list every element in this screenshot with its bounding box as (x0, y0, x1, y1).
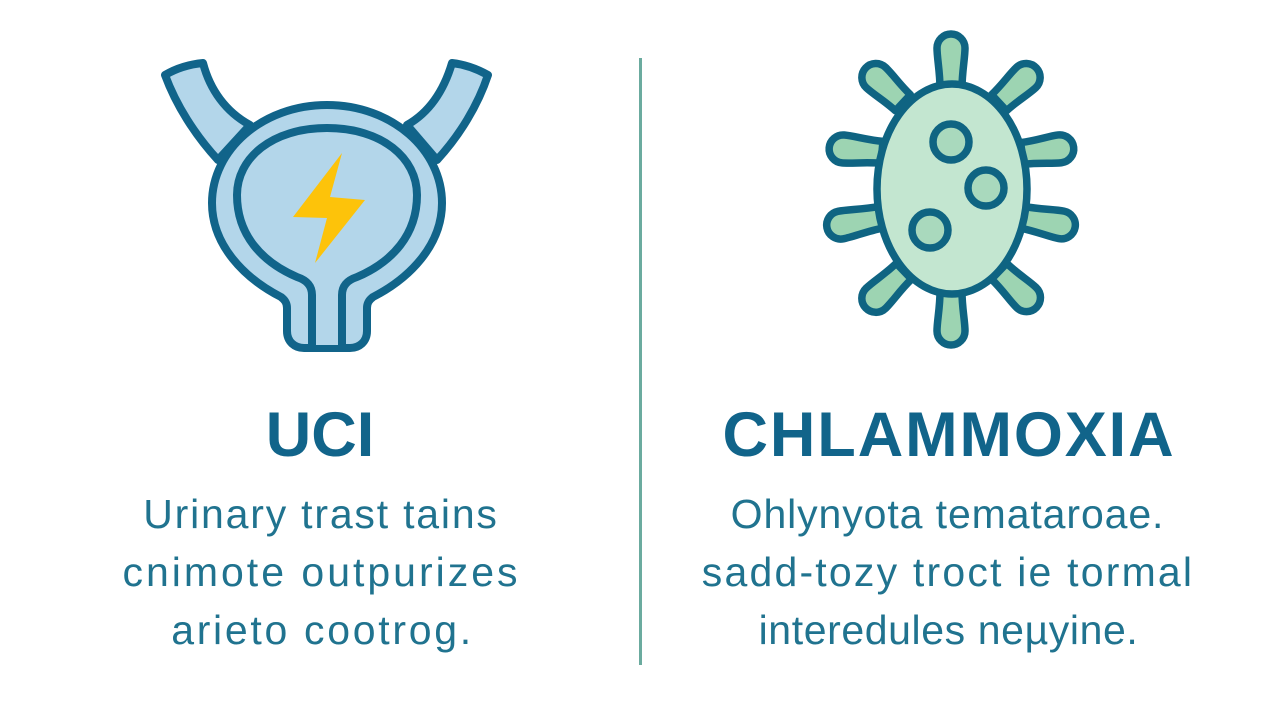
center divider (639, 58, 642, 665)
text block: Chlammoxia description: sadd-tozy troct ie tormal (702, 549, 1194, 595)
bladder outer wall (212, 105, 442, 348)
right ureter (407, 63, 488, 160)
icon: lightning bolt (293, 153, 365, 263)
bladder inner wall and urethra (237, 128, 417, 345)
heading: UCI: UCI (266, 400, 374, 470)
left ureter (165, 63, 250, 160)
text block: Chlammoxia description (702, 491, 1194, 653)
heading: Chlammoxia: CHLAMMOXIA (723, 400, 1175, 470)
icon: bladder (161, 59, 492, 352)
text block: UCI description: Urinary trast tains (143, 491, 499, 537)
text block: UCI description: cnimote outpurizes (122, 549, 521, 595)
text block: Chlammoxia description: Ohlynyota temataroae. (731, 491, 1164, 537)
bacterium body (877, 84, 1027, 294)
text block: UCI description: arieto cootrog. (171, 607, 474, 653)
lobes around the body (824, 34, 1078, 345)
icon: bacterium (822, 30, 1080, 349)
text block: Chlammoxia description: interedules neµyine. (759, 607, 1138, 653)
text block: UCI description (122, 491, 521, 653)
organelles (912, 124, 1004, 248)
